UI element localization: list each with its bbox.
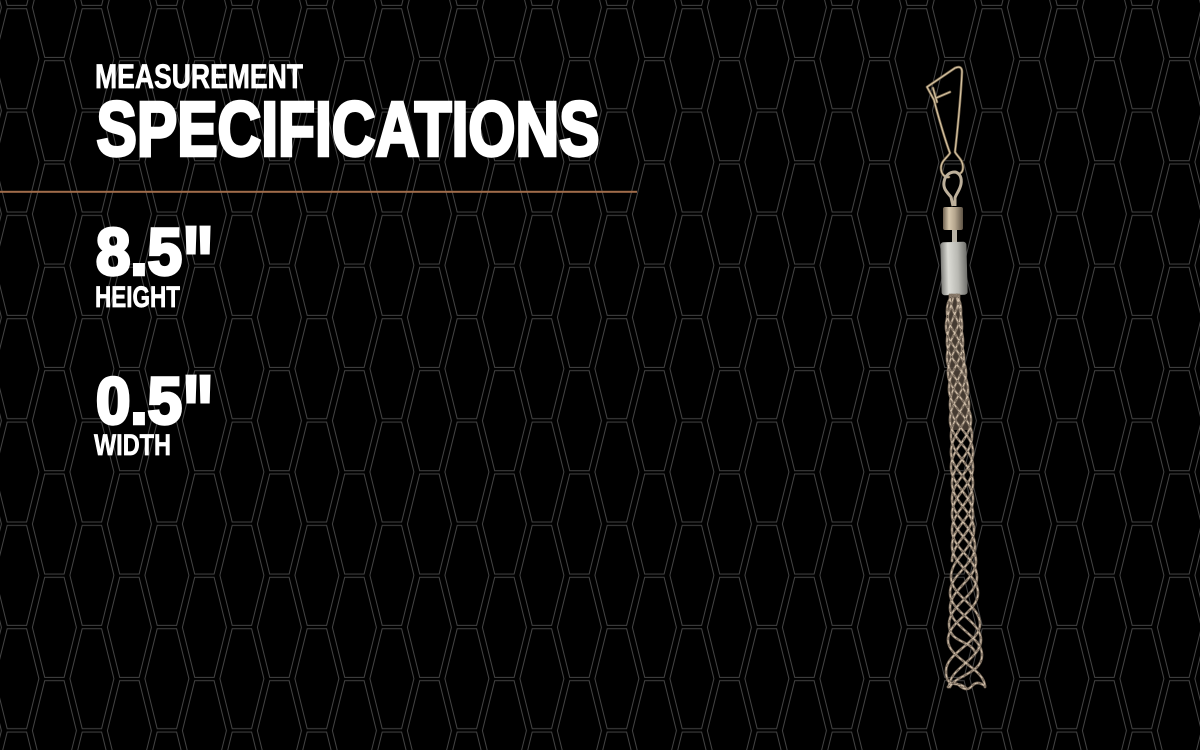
width label: WIDTH [94,429,171,462]
height label: HEIGHT [95,281,180,314]
heading line: specifications: SPECIFICATIONS [96,86,600,172]
icon: crimp sleeve [940,242,968,295]
height value: 8.5 [96,214,182,288]
heading line: measurement: MEASUREMENT [95,58,303,96]
product image: wire mesh grip with snap and swivel [927,67,985,689]
divider rule [0,191,637,193]
icon: snap clip [927,67,963,177]
height value: '' [184,208,212,315]
woven strands shadow [946,295,985,689]
width measurement [94,357,212,464]
width value: '' [184,357,212,464]
icon: swivel barrel [943,207,963,230]
woven strands texture [946,295,985,689]
dense upper weave [946,295,972,430]
icon: swivel pin [952,230,957,242]
height measurement [95,208,212,315]
heading [95,58,600,172]
panel: measurement specifications [0,58,637,464]
width value: 0.5 [96,364,182,438]
wire mesh body [946,295,985,689]
woven strands highlight [946,295,985,689]
icon: swivel eye [944,172,961,206]
